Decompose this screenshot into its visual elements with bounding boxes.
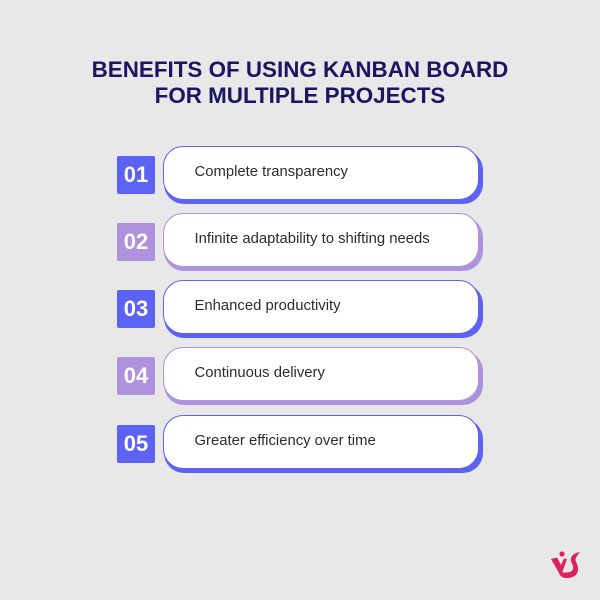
badge 03 [117,290,155,328]
badge 04 [117,357,155,395]
card: complete transparency: Complete transparency [194,164,348,180]
badge 05 [117,425,155,463]
card: greater efficiency: Greater efficiency over time [194,433,376,449]
card: infinite adaptability [163,213,479,267]
badge 05: 05 [124,431,148,456]
card: enhanced productivity: Enhanced productivity [194,298,341,314]
list item 02 [117,213,483,271]
list item 05 [117,415,483,473]
badge 01 [117,156,155,194]
card: complete transparency [163,146,479,200]
card: infinite adaptability: Infinite adaptability to shifting needs [194,231,430,247]
icon: brand logo [551,551,580,578]
list item 04 [117,347,483,405]
title: BENEFITS OF USING KANBAN BOARD [92,56,508,82]
card: continuous delivery [163,347,479,401]
badge 02 [117,223,155,261]
card: continuous delivery: Continuous delivery [194,365,325,381]
list item 01 [117,146,483,204]
card: greater efficiency [163,415,479,469]
title: FOR MULTIPLE PROJECTS [155,83,445,108]
badge 01: 01 [124,162,148,187]
badge 04: 04 [124,363,148,388]
badge 03: 03 [124,296,148,321]
title [92,56,508,108]
card: enhanced productivity [163,280,479,334]
list item 03 [117,280,483,338]
badge 02: 02 [124,229,148,254]
